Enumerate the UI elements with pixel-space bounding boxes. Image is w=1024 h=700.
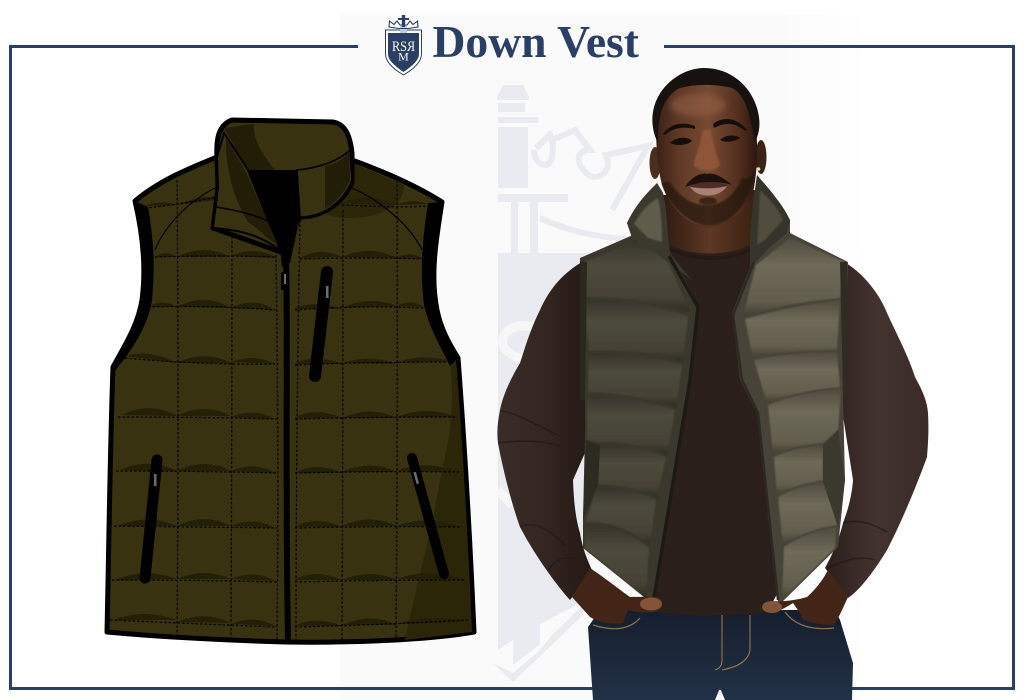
collar dark fold: [224, 124, 275, 170]
raglan seams: [155, 187, 422, 250]
vest side panels: [583, 440, 600, 520]
right collar flap: [297, 150, 352, 217]
sweater collar: [665, 246, 755, 258]
icon: RSM crest logo: [386, 15, 422, 75]
beard: [662, 173, 755, 226]
right hand: [762, 570, 848, 625]
hair: [652, 68, 759, 143]
left arm: [497, 262, 595, 600]
sweater: [645, 235, 795, 616]
collar fold line: [216, 207, 268, 221]
title: Down Vest: [432, 16, 639, 67]
quilting stitches: [110, 180, 468, 640]
collar flap shadow: [325, 152, 350, 209]
vest right collar: [750, 175, 790, 268]
eyes: [670, 136, 740, 145]
quilting puffs: [113, 197, 467, 626]
vest right panel base: [732, 175, 848, 602]
photo backdrop: [340, 15, 870, 700]
right collar highlight: [757, 190, 783, 245]
vest body: [107, 157, 474, 642]
lower left pocket: [145, 460, 157, 578]
earring: [757, 167, 760, 171]
forehead highlight: [670, 94, 726, 116]
right armhole band: [422, 202, 458, 366]
photo: man wearing down vest: [497, 68, 928, 700]
jeans stitching: [715, 615, 750, 670]
icon: RSM crest logo: RS: [392, 39, 407, 55]
vest left puffs: [584, 240, 690, 598]
vest left collar: [627, 183, 692, 280]
vest right puffs: [743, 238, 845, 600]
vest zippers: [654, 256, 698, 598]
ears: [650, 147, 660, 179]
watermark emblem: [493, 85, 648, 682]
left collar shadow: [226, 138, 278, 245]
shoulder shadow: [324, 163, 404, 218]
chin soul patch: [699, 197, 717, 205]
lips: [689, 182, 728, 196]
right thumb: [762, 601, 782, 613]
neck: [662, 190, 757, 254]
zipper pull: [281, 272, 287, 290]
icon: RSM crest logo: R: [407, 39, 415, 55]
neck opening: [248, 170, 300, 267]
left hand: [572, 568, 662, 624]
icon: RSM crest logo: M: [398, 50, 409, 64]
left collar flap: [213, 133, 280, 250]
nose highlight: [694, 130, 720, 170]
lower right shading: [405, 358, 472, 640]
left collar highlight: [634, 198, 662, 242]
eyebrows: [663, 119, 747, 135]
collar back: [213, 120, 352, 252]
vest left panel base: [580, 183, 700, 601]
chest pocket: [315, 272, 328, 376]
face: [656, 78, 757, 226]
right arm: [825, 263, 928, 598]
main zipper: [286, 262, 288, 640]
moustache: [685, 173, 732, 187]
jeans: [588, 610, 853, 700]
left thumb: [640, 598, 662, 610]
left armhole band: [112, 201, 154, 372]
right arm cuff crease: [828, 521, 887, 568]
illustration: flat down vest: [107, 120, 474, 642]
lower right pocket: [412, 458, 444, 574]
left arm creases: [498, 411, 575, 570]
